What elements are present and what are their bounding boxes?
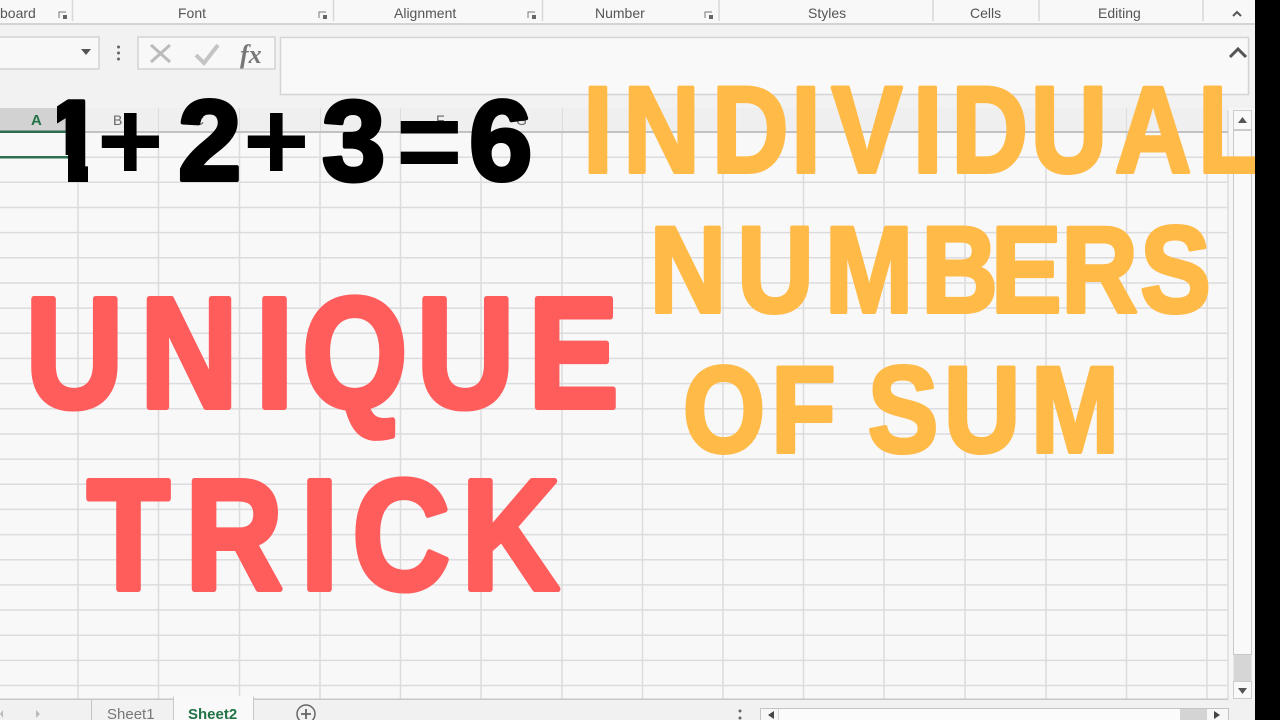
ribbon group labels: board (0, 5, 36, 21)
ribbon group labels: Number (595, 5, 645, 21)
headline: of sum: OF SUM (683, 342, 1119, 479)
right black bar (1255, 0, 1280, 720)
ribbon group labels: Editing (1098, 5, 1141, 21)
column headers: C (194, 112, 204, 128)
column headers: B (113, 112, 122, 128)
column headers: G (516, 112, 527, 128)
ribbon group labels: Font (178, 5, 206, 21)
ribbon group labels: Styles (808, 5, 846, 21)
ribbon group labels: Cells (970, 5, 1001, 21)
ribbon group labels (0, 0, 1255, 25)
column headers: F (436, 112, 445, 128)
column headers: A (31, 112, 42, 129)
column headers (0, 108, 1228, 132)
worksheet grid (0, 110, 1228, 699)
formula bar (0, 25, 1255, 108)
ribbon group labels: Alignment (394, 5, 456, 21)
headline: numbers: NUMBERS (650, 202, 1211, 339)
sheet tab bar (0, 696, 1255, 720)
headline: individual: INDIVIDUAL (583, 62, 1263, 199)
vertical scrollbar (1229, 108, 1255, 699)
headline: unique: UNIQUE (26, 265, 618, 441)
equation heading: 1+2+3=6 (41, 78, 532, 205)
formula bar: fx (240, 40, 262, 69)
icon: confirm (196, 45, 218, 63)
headline: trick: TRICK (87, 447, 559, 623)
icon: cancel (151, 45, 170, 62)
